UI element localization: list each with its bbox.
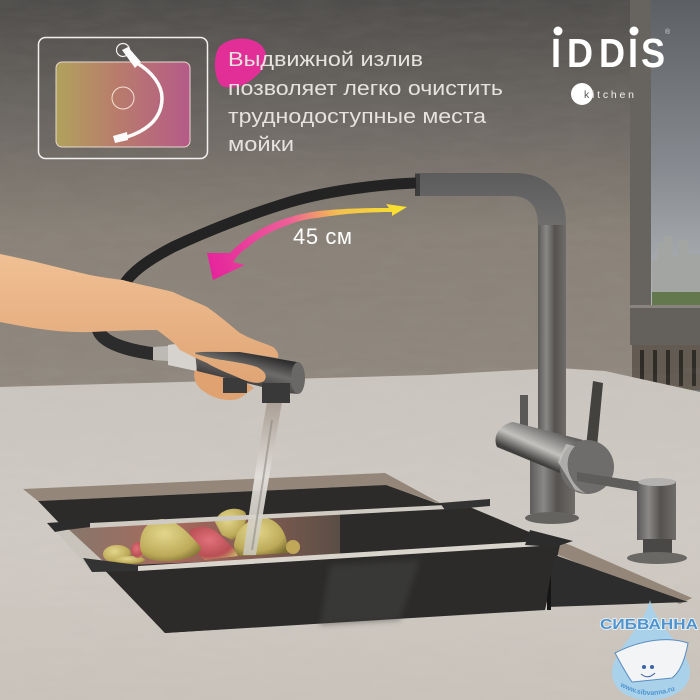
fingers under spray head <box>194 370 254 400</box>
watermark: Сибванна <box>600 600 699 700</box>
watermark: Сибванна: www.sibvanna.ru <box>620 682 675 695</box>
description text: позволяет легко очистить <box>228 78 503 100</box>
icon: sink with pull-out hose <box>38 38 208 158</box>
stretch arrow <box>207 204 407 280</box>
brand logo <box>551 26 671 105</box>
wall background <box>0 0 632 392</box>
watermark: Сибванна: СИБВАННА <box>600 617 699 633</box>
colander corners <box>47 520 90 532</box>
sink right section <box>548 554 688 607</box>
sink stone rim <box>23 473 692 604</box>
hose <box>98 183 416 354</box>
description text: Выдвижной излив <box>228 49 423 71</box>
faucet base <box>530 457 575 514</box>
faucet body <box>495 422 583 473</box>
description text: труднодоступные места <box>228 106 487 128</box>
colander inside <box>65 512 340 566</box>
colander with pears <box>47 499 573 572</box>
radiator <box>632 345 700 390</box>
faucet handles <box>520 395 528 428</box>
faucet neck <box>415 173 566 440</box>
colander bars <box>90 504 466 528</box>
soap dispenser <box>637 481 676 540</box>
length label: 45 см <box>293 224 352 249</box>
hand and arm <box>0 254 278 383</box>
brand logo: IDDIS <box>551 31 665 77</box>
sink front wall <box>108 546 556 633</box>
faucet with soap dispenser <box>415 173 687 564</box>
sink back basin <box>38 485 560 633</box>
countertop <box>0 368 700 700</box>
brand logo: k itchen <box>584 89 634 101</box>
pink blob accent <box>215 38 266 88</box>
water stream <box>243 402 282 555</box>
soap arm <box>577 472 642 492</box>
brand logo: ® <box>665 28 671 36</box>
description text: мойки <box>228 134 294 156</box>
window <box>630 0 700 345</box>
description text <box>228 49 503 156</box>
pull-out spray head <box>153 344 305 403</box>
pears <box>103 509 300 564</box>
sink <box>23 473 692 633</box>
